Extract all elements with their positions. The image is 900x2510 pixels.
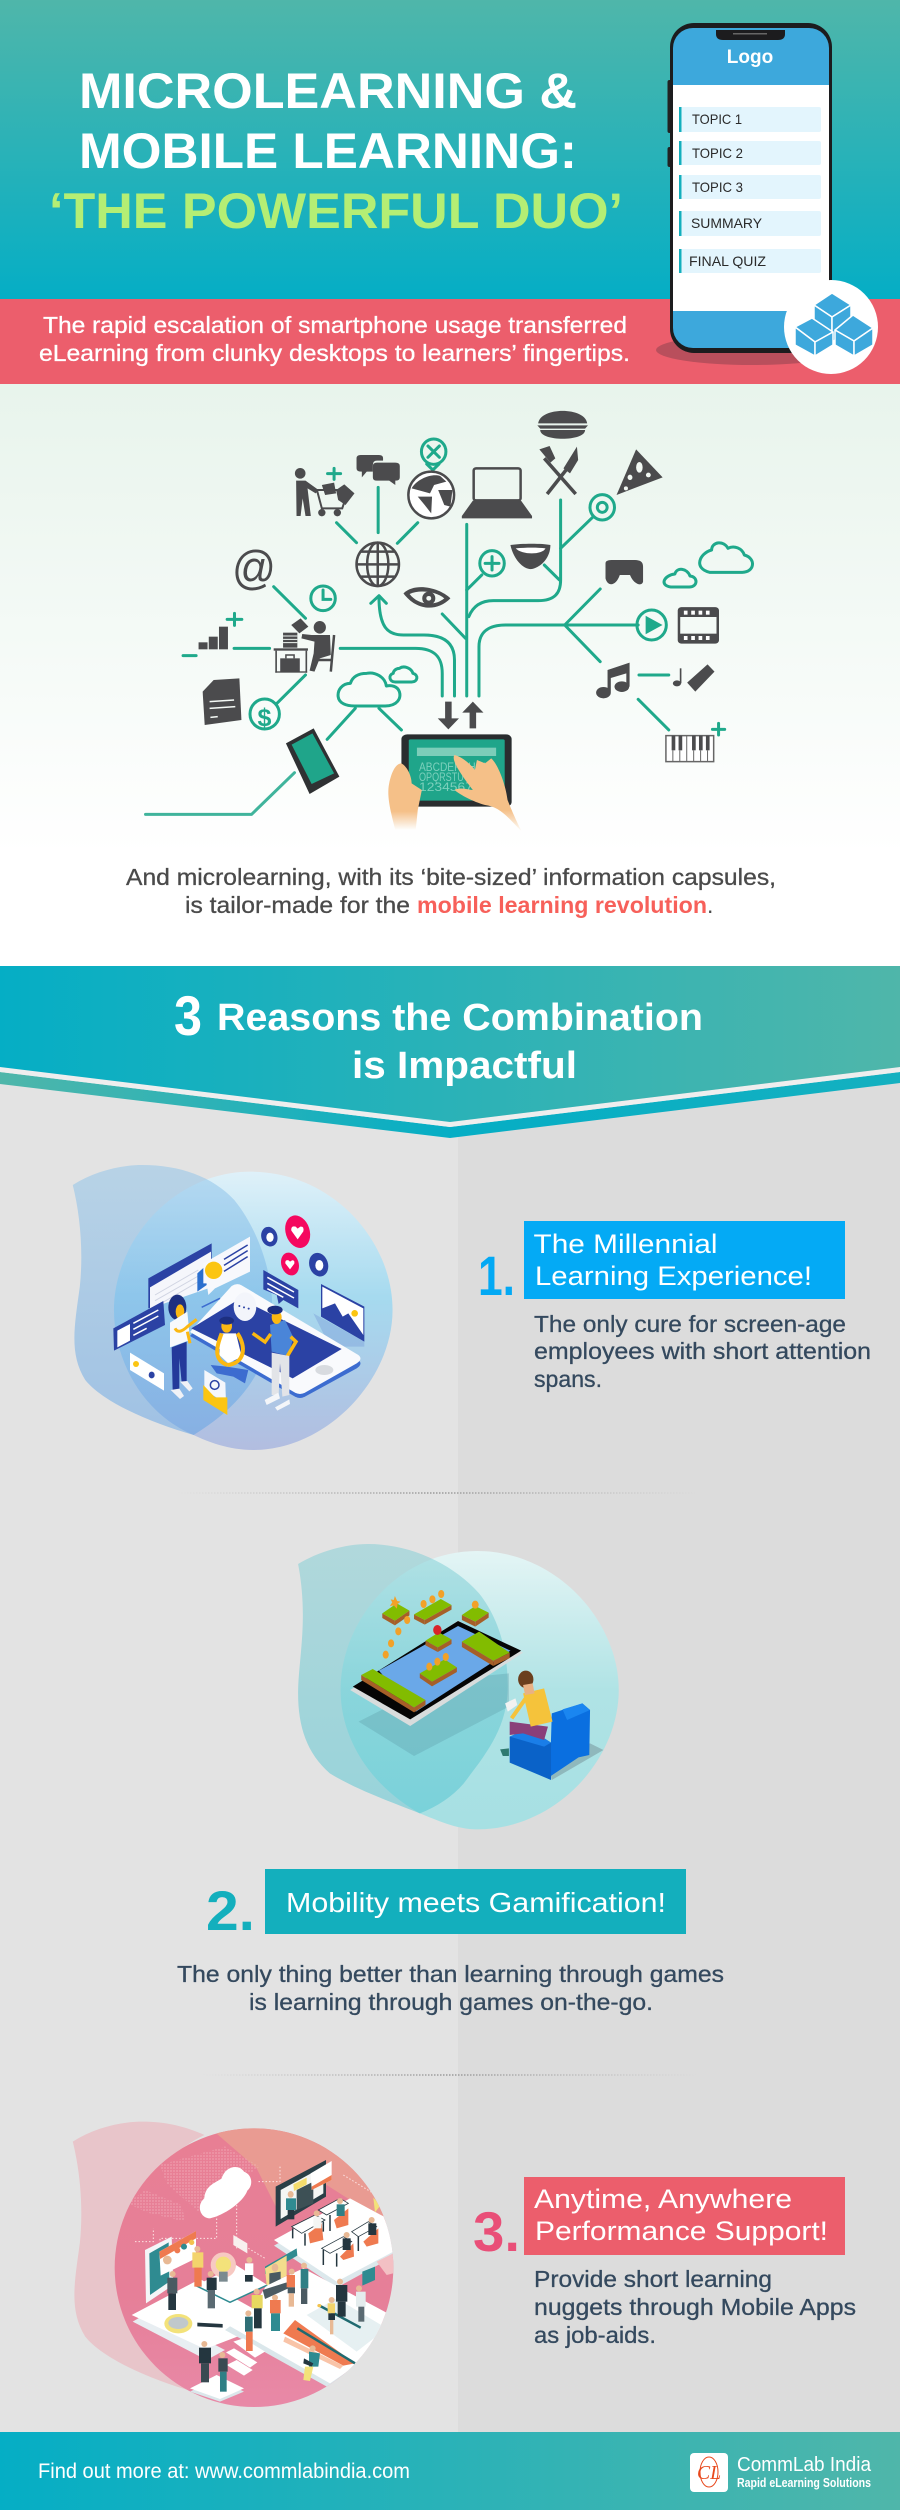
section heading: is Impactful: [352, 1045, 577, 1087]
illustration: performance support city: [115, 2125, 403, 2407]
icon: CommLab logo mark: [690, 2453, 728, 2492]
game platforms: [361, 1599, 510, 1712]
icon: gamepad: [606, 560, 643, 584]
floating cards: [113, 1237, 364, 1391]
icon: piano keyboard: [666, 736, 714, 762]
icon: eye: [403, 587, 450, 608]
panel: reason 1: [73, 1165, 871, 1450]
panel: pink subtitle band: [0, 299, 900, 384]
icon: worker at desk: [274, 618, 334, 673]
at sign: @: [232, 541, 276, 594]
panel: reason 3: [73, 2122, 856, 2407]
standing man: [253, 1306, 296, 1411]
panel: section header chevron: [0, 966, 900, 1138]
icon: earth globe: [408, 472, 454, 518]
title: MICROLEARNING &: [79, 63, 577, 119]
reason 1 description: The only cure for screen-age: [534, 1311, 846, 1337]
icon: hands on tablet: [388, 755, 522, 832]
desks and chairs: [292, 2198, 378, 2267]
game phone: [350, 1621, 523, 1726]
pink heading box: Anytime, Anywhere: [534, 2184, 792, 2214]
reason 3 description: as job-aids.: [534, 2322, 656, 2348]
magnifier: [164, 2314, 223, 2333]
subtitle text: [39, 312, 630, 366]
intro text: mobile learning revolution: [417, 892, 707, 918]
icon: tablet: [401, 734, 512, 807]
phone mockup: [656, 23, 878, 374]
icon: blue blob backdrop: [73, 1165, 393, 1450]
icon: up and down arrows: [438, 702, 483, 729]
icon: wire globe: [357, 543, 399, 586]
tablet keyboard letters: OPQRSTUVWXYZ: [419, 772, 496, 784]
tablet keyboard letters: [419, 762, 497, 794]
reason 2 description: is learning through games on-the-go.: [249, 1989, 653, 2015]
brand tagline: Rapid eLearning Solutions: [737, 2476, 871, 2490]
number 1: 1.: [478, 1244, 515, 1307]
seated man: [211, 1317, 248, 1383]
phone topic list: TOPIC 3: [692, 179, 743, 195]
icon: smartphone: [286, 728, 339, 794]
reason 1 description: spans.: [534, 1366, 602, 1392]
network connector lines: [146, 487, 669, 814]
player in armchair: [500, 1671, 603, 1780]
icon: laptop: [462, 468, 532, 518]
section heading: 3: [174, 984, 202, 1047]
intro text: And microlearning, with its ‘bite-sized’ information capsules,: [126, 864, 776, 890]
icon: note and pencil: [673, 664, 714, 692]
screens: [145, 2160, 381, 2303]
section heading: [174, 984, 703, 1087]
isometric platforms: [132, 2198, 403, 2402]
woman: [168, 1295, 197, 1399]
pink heading box: [524, 2177, 845, 2255]
panel: reason 2: [177, 1544, 724, 2015]
subtitle text: The rapid escalation of smartphone usage transferred: [43, 312, 627, 338]
icon: music note: [596, 663, 630, 698]
icon: CommLab logo mark: CL: [697, 2462, 721, 2484]
reason 3 description: [534, 2266, 856, 2348]
phone logo label: Logo: [727, 47, 773, 68]
brand name: CommLab India: [737, 2454, 872, 2476]
phone shadow: [359, 1673, 509, 1756]
circuit lines: [135, 2167, 373, 2258]
phone in illustration: [190, 1284, 364, 1398]
salmon sky: [216, 2128, 386, 2222]
icon: cubes logo: [784, 280, 878, 374]
number 2: 2.: [206, 1879, 255, 1942]
cloud: [200, 2167, 251, 2218]
reason 1 description: employees with short attention: [534, 1338, 871, 1364]
icon: document: [203, 678, 241, 725]
reason 1 description: [534, 1311, 871, 1392]
subtitle text: eLearning from clunky desktops to learners’ fingertips.: [39, 340, 630, 366]
illustration: millennial learners: [113, 1212, 364, 1415]
panel: header banner: [0, 0, 900, 299]
world map dots: [127, 2147, 260, 2222]
pink heading box: Performance Support!: [535, 2216, 828, 2246]
intro text: .: [707, 892, 713, 918]
icon: fork and knife: [539, 446, 578, 494]
dark pictograms: [199, 411, 718, 807]
network illustration: [146, 411, 753, 832]
icon: speech bubbles: [357, 455, 400, 485]
phone topic list: SUMMARY: [691, 215, 763, 231]
icon: burger: [537, 411, 588, 439]
dollar sign: $: [258, 704, 272, 732]
blue heading box: Learning Experience!: [535, 1261, 812, 1291]
blue heading box: [524, 1221, 845, 1299]
teal heading box: Mobility meets Gamification!: [286, 1887, 666, 1918]
title: [49, 63, 623, 239]
reason 2 description: The only thing better than learning through games: [177, 1961, 724, 1987]
icon: teal circle badges: [183, 439, 725, 735]
notebook and pencil: [283, 2304, 361, 2369]
icon: shopper with cart: [295, 468, 354, 516]
number 3: 3.: [473, 2200, 520, 2263]
tablet keyboard letters: ABCDEFGHIJKL: [419, 762, 497, 774]
panel: footer: [0, 2432, 900, 2510]
centre table: [196, 2252, 267, 2302]
footer link text: Find out more at: www.commlabindia.com: [38, 2460, 410, 2483]
people: [167, 2198, 376, 2392]
reason 3 description: Provide short learning: [534, 2266, 772, 2292]
icon: clouds: [338, 543, 753, 706]
reason 2 description: [177, 1961, 724, 2015]
blue heading box: The Millennial: [534, 1229, 718, 1259]
reason 3 description: nuggets through Mobile Apps: [534, 2294, 856, 2320]
phone topic list: FINAL QUIZ: [689, 253, 766, 269]
intro text: is tailor-made for the: [185, 892, 410, 918]
reaction icons: [259, 1212, 331, 1279]
icon: film strip: [679, 608, 718, 642]
icon: pink blob backdrop: [73, 2122, 204, 2392]
title: ‘THE POWERFUL DUO’: [49, 183, 623, 239]
icon: signal bars: [199, 627, 228, 649]
phone topic list: TOPIC 1: [692, 111, 742, 127]
tablet keyboard letters: 1234567890: [419, 782, 496, 794]
intro text: [126, 864, 776, 918]
section heading: Reasons the Combination: [217, 997, 703, 1039]
panel: mobile ecosystem: [0, 384, 900, 918]
phone topic list: [679, 107, 821, 273]
coins and pickups: [383, 1590, 479, 1671]
illustration: mobile game: [298, 1544, 619, 1829]
envelope: [203, 1370, 227, 1415]
icon: pizza slice: [617, 449, 663, 495]
teal heading box: [265, 1869, 686, 1934]
title: MOBILE LEARNING:: [79, 123, 577, 179]
icon: mouth and tongue: [510, 544, 550, 569]
phone topic list: TOPIC 2: [692, 145, 743, 161]
